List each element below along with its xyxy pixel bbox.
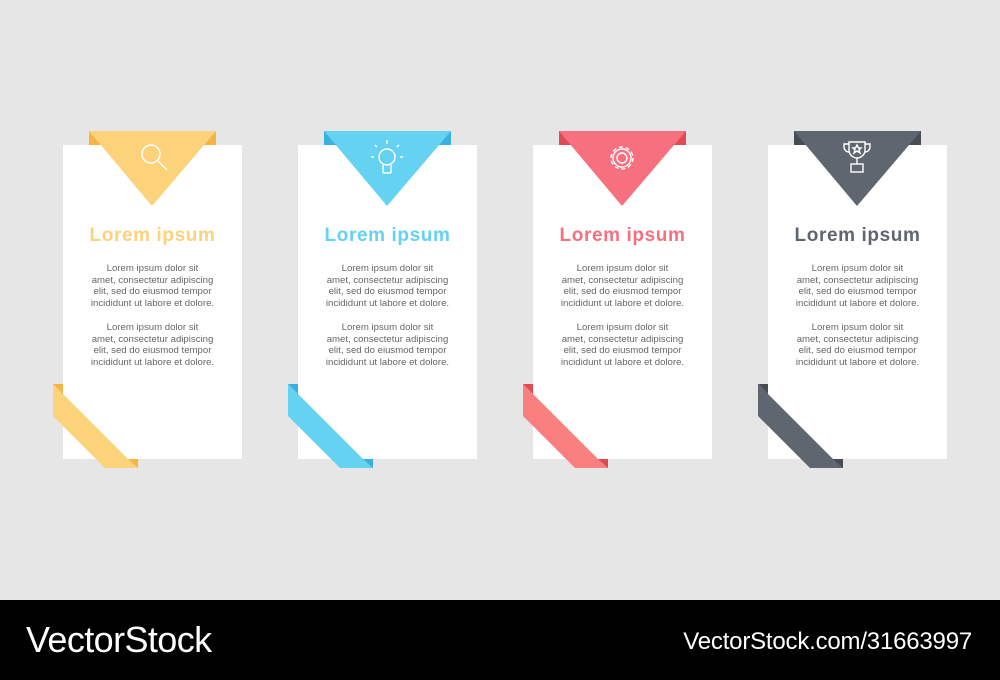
card 2: blue: Lorem ipsum dolor sit [342, 322, 433, 333]
text block: incididunt ut labore et dolore. [326, 298, 449, 309]
card 2: blue: amet, consectetur adipiscing [327, 334, 448, 345]
text block: elit, sed do eiusmod tempor [564, 286, 681, 297]
text block: elit, sed do eiusmod tempor [329, 286, 446, 297]
card 1: yellow: elit, sed do eiusmod tempor [94, 345, 211, 356]
text block: elit, sed do eiusmod tempor [94, 286, 211, 297]
card 3: red: incididunt ut labore et dolore. [561, 357, 684, 368]
footer logo: VectorStock [26, 619, 212, 660]
card 2: blue: incididunt ut labore et dolore. [326, 357, 449, 368]
title: Lorem ipsum [90, 225, 215, 246]
card 4: grey: Lorem ipsum dolor sit [812, 322, 903, 333]
text block: incididunt ut labore et dolore. [561, 298, 684, 309]
card 3: red: amet, consectetur adipiscing [562, 334, 683, 345]
text block: elit, sed do eiusmod tempor [799, 286, 916, 297]
text block [796, 263, 919, 309]
footer url: VectorStock.com/31663997 [683, 628, 972, 655]
text block: amet, consectetur adipiscing [562, 275, 683, 286]
icon: gear [611, 147, 633, 169]
card 1: yellow: amet, consectetur adipiscing [92, 334, 213, 345]
text block: amet, consectetur adipiscing [327, 275, 448, 286]
text block: incididunt ut labore et dolore. [91, 298, 214, 309]
card 4: grey [758, 131, 947, 468]
card 3: red: Lorem ipsum dolor sit [577, 322, 668, 333]
footer bar [0, 600, 1000, 680]
text block: Lorem ipsum dolor sit [107, 263, 198, 274]
card 1: yellow: Lorem ipsum dolor sit [107, 322, 198, 333]
card 1: yellow [53, 131, 242, 468]
text block: incididunt ut labore et dolore. [796, 298, 919, 309]
card 2: blue [288, 131, 477, 468]
text block [91, 263, 214, 309]
card 2: blue: elit, sed do eiusmod tempor [329, 345, 446, 356]
card 1: yellow: incididunt ut labore et dolore. [91, 357, 214, 368]
card 4: grey: incididunt ut labore et dolore. [796, 357, 919, 368]
text block: Lorem ipsum dolor sit [342, 263, 433, 274]
text block [561, 263, 684, 309]
text block: Lorem ipsum dolor sit [577, 263, 668, 274]
card 3: red: elit, sed do eiusmod tempor [564, 345, 681, 356]
title: Lorem ipsum [325, 225, 450, 246]
icon: trophy [844, 142, 870, 172]
title: Lorem ipsum [560, 225, 685, 246]
text block: Lorem ipsum dolor sit [812, 263, 903, 274]
text block [326, 263, 449, 309]
card 4: grey: amet, consectetur adipiscing [797, 334, 918, 345]
icon: bulb [371, 140, 403, 173]
title: Lorem ipsum [795, 225, 920, 246]
icon: magnifier [142, 145, 167, 170]
card 3: red [523, 131, 712, 468]
card 4: grey: elit, sed do eiusmod tempor [799, 345, 916, 356]
text block: amet, consectetur adipiscing [797, 275, 918, 286]
text block: amet, consectetur adipiscing [92, 275, 213, 286]
